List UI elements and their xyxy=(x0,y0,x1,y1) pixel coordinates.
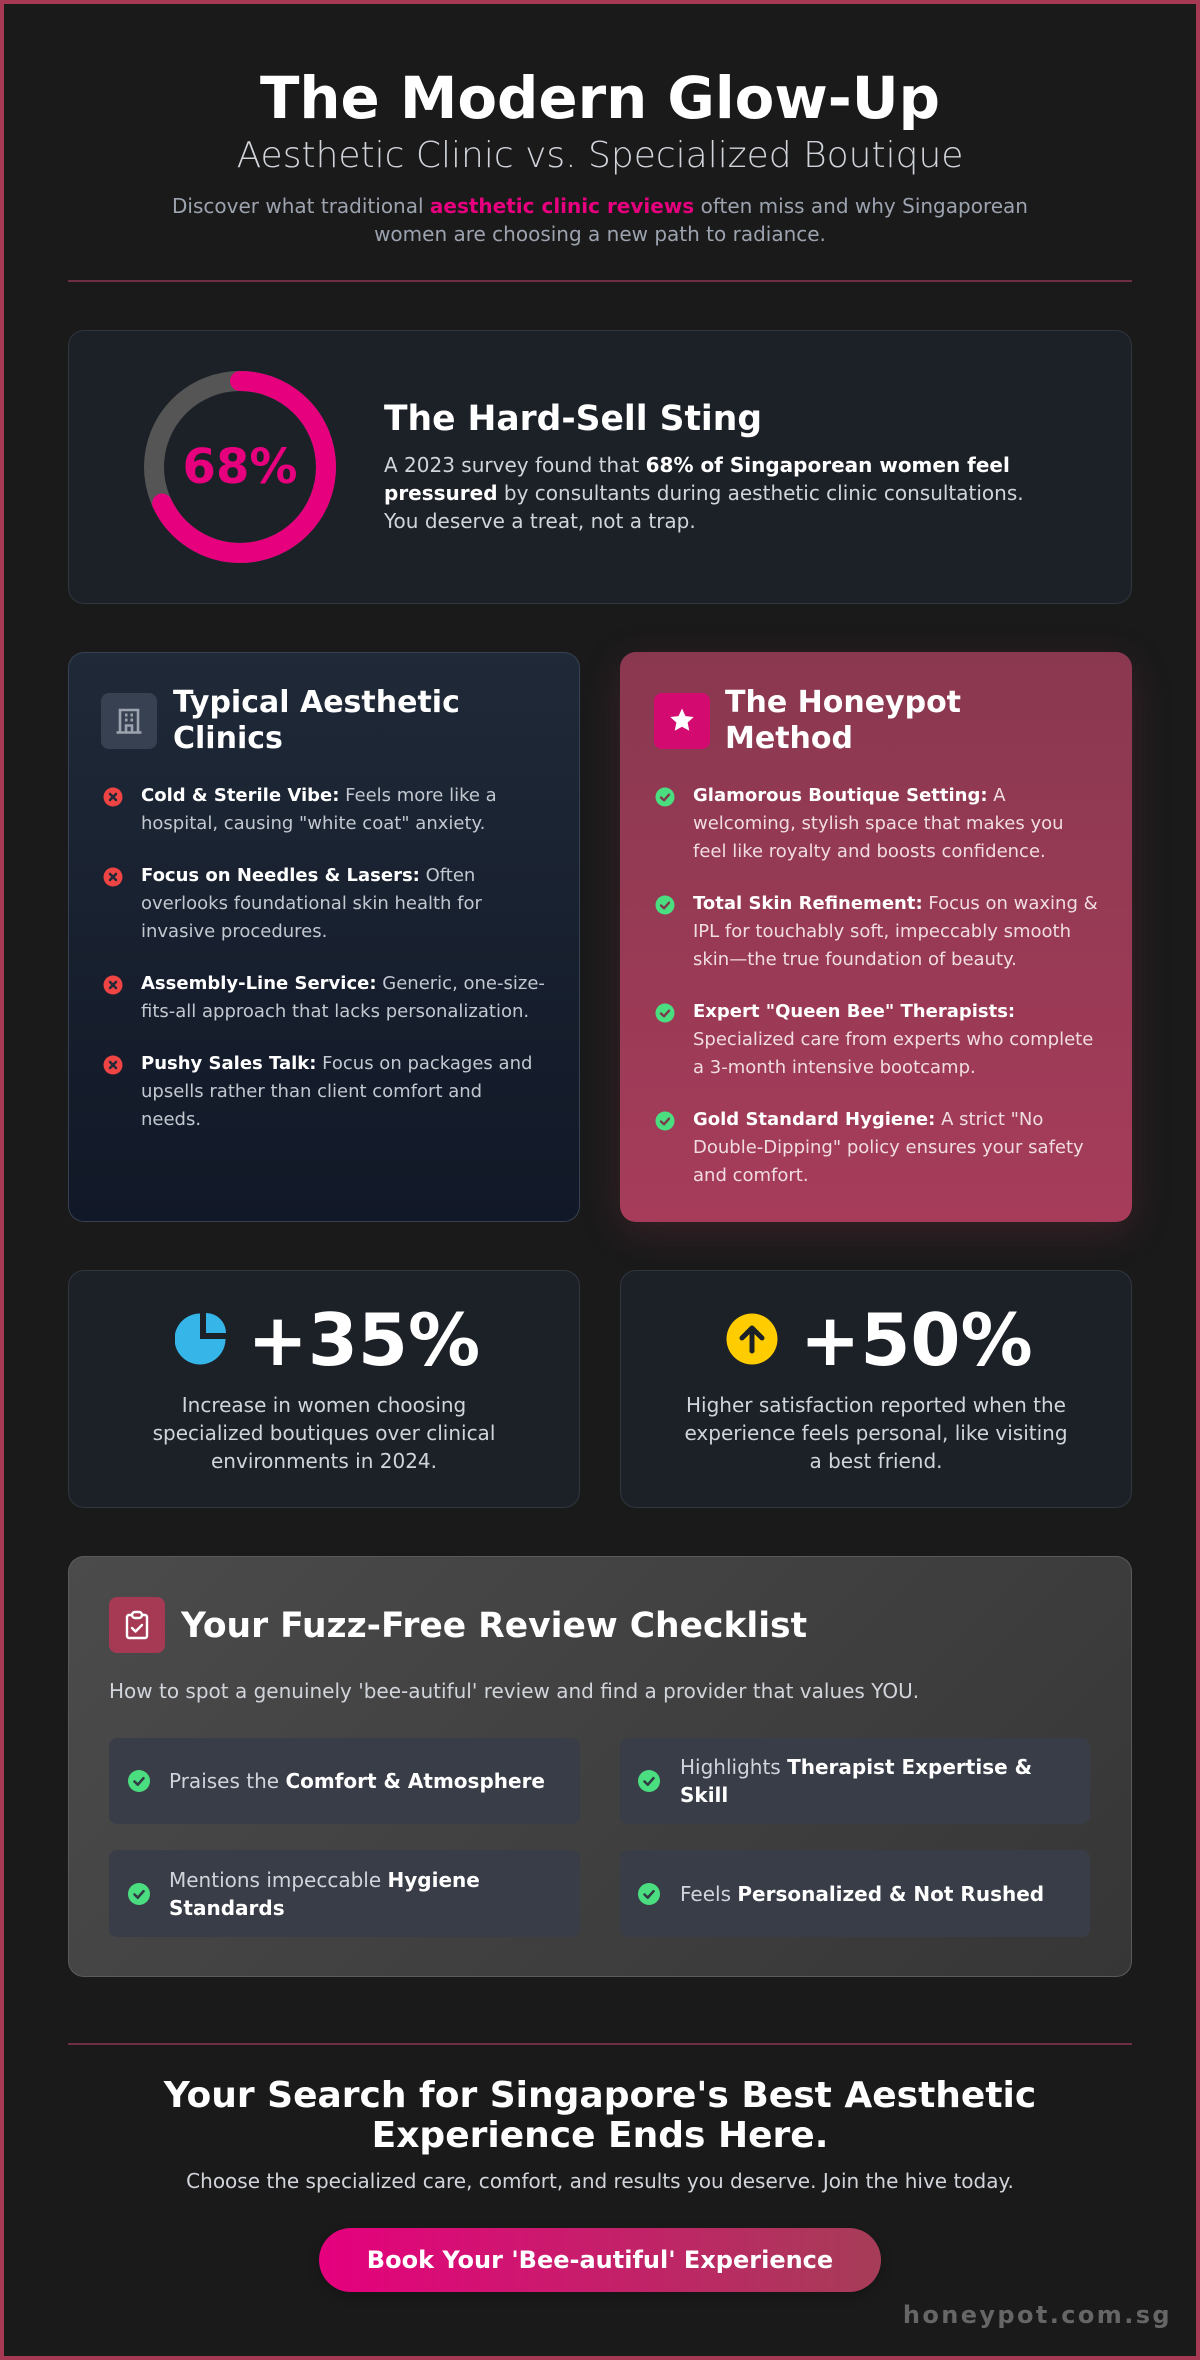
title: The Modern Glow-Up xyxy=(260,64,940,132)
icon: check xyxy=(656,1112,674,1130)
list item: fits-all approach that lacks personalization. xyxy=(141,1001,529,1022)
intro text xyxy=(172,194,1028,246)
intro text: Discover what traditional aesthetic clinic reviews often miss and why Singaporean xyxy=(172,194,1028,218)
heading: Clinics xyxy=(173,721,283,756)
list item: Total Skin Refinement: Focus on waxing & xyxy=(693,893,1098,914)
panel: review checklist xyxy=(68,1556,1132,1977)
panel: the honeypot method xyxy=(620,652,1132,1222)
list item: Focus on Needles & Lasers: Often xyxy=(141,865,475,886)
checklist item xyxy=(620,1738,1090,1824)
list item: Expert "Queen Bee" Therapists: xyxy=(693,1001,1015,1022)
icon: check xyxy=(656,788,674,806)
list item xyxy=(693,1001,1093,1078)
stat description: environments in 2024. xyxy=(211,1449,437,1473)
list item: Assembly-Line Service: Generic, one-size- xyxy=(141,973,545,994)
list item xyxy=(693,785,1064,862)
heading xyxy=(725,685,961,756)
donut chart: 68%: 68% xyxy=(183,439,297,495)
icon: check xyxy=(656,1004,674,1022)
donut chart: 68% xyxy=(144,371,336,563)
icon: check xyxy=(656,896,674,914)
list item: overlooks foundational skin health for xyxy=(141,893,482,914)
stat description: a best friend. xyxy=(809,1449,943,1473)
list item xyxy=(141,1053,532,1130)
intro text: women are choosing a new path to radiance. xyxy=(374,222,826,246)
list item xyxy=(693,1109,1084,1186)
list item: upsells rather than client comfort and xyxy=(141,1081,482,1102)
list item xyxy=(693,893,1098,970)
list item: hospital, causing "white coat" anxiety. xyxy=(141,813,485,834)
heading: Method xyxy=(725,721,853,756)
icon: up arrow xyxy=(726,1314,778,1364)
watermark: honeypot.com.sg xyxy=(903,2301,1172,2329)
list item: and comfort. xyxy=(693,1165,809,1186)
checklist item: Praises the Comfort & Atmosphere xyxy=(169,1769,545,1793)
checklist item: Highlights Therapist Expertise & xyxy=(680,1755,1032,1779)
closing heading: Experience Ends Here. xyxy=(372,2115,828,2156)
list item: feel like royalty and boosts confidence. xyxy=(693,841,1046,862)
checklist item: Standards xyxy=(169,1896,285,1920)
list item: a 3-month intensive bootcamp. xyxy=(693,1057,976,1078)
heading: Typical Aesthetic xyxy=(173,685,460,720)
panel: stat +50% xyxy=(620,1270,1132,1508)
checklist item xyxy=(620,1850,1090,1937)
list item: Double-Dipping" policy ensures your safety xyxy=(693,1137,1084,1158)
panel: hard-sell sting xyxy=(68,330,1132,604)
body text: You deserve a treat, not a trap. xyxy=(384,509,696,533)
stat description xyxy=(153,1393,495,1473)
button xyxy=(319,2228,881,2292)
stat description: experience feels personal, like visiting xyxy=(684,1421,1068,1445)
panel: typical aesthetic clinics xyxy=(68,652,580,1222)
heading: Your Fuzz-Free Review Checklist xyxy=(181,1606,807,1646)
subtitle: Aesthetic Clinic vs. Specialized Boutique xyxy=(237,135,963,176)
list item xyxy=(141,785,497,834)
button: Book Your 'Bee-autiful' Experience xyxy=(367,2246,833,2274)
list item: Specialized care from experts who complete xyxy=(693,1029,1093,1050)
icon: cross xyxy=(104,976,122,994)
icon: clipboard xyxy=(109,1597,165,1653)
stat value: +50% xyxy=(800,1298,1033,1382)
stat description: Increase in women choosing xyxy=(182,1393,466,1417)
checklist item xyxy=(109,1850,580,1937)
icon: building xyxy=(101,693,157,749)
stat description xyxy=(684,1393,1068,1473)
body text: pressured by consultants during aesthetic clinic consultations. xyxy=(384,481,1024,505)
list item: skin—the true foundation of beauty. xyxy=(693,949,1017,970)
stat description: Higher satisfaction reported when the xyxy=(686,1393,1066,1417)
list item: Glamorous Boutique Setting: A xyxy=(693,785,1006,806)
checklist item: Skill xyxy=(680,1783,728,1807)
stat description: specialized boutiques over clinical xyxy=(153,1421,495,1445)
list item: invasive procedures. xyxy=(141,921,327,942)
closing heading xyxy=(163,2075,1036,2156)
icon: star xyxy=(654,693,710,749)
list item: Gold Standard Hygiene: A strict "No xyxy=(693,1109,1043,1130)
list item: needs. xyxy=(141,1109,201,1130)
icon: cross xyxy=(104,1056,122,1074)
icon: cross xyxy=(104,868,122,886)
closing text: Choose the specialized care, comfort, and results you deserve. Join the hive today. xyxy=(186,2169,1014,2193)
heading: The Honeypot xyxy=(725,685,961,720)
list item xyxy=(141,973,545,1022)
list item: Cold & Sterile Vibe: Feels more like a xyxy=(141,785,497,806)
header xyxy=(172,64,1028,246)
list item: welcoming, stylish space that makes you xyxy=(693,813,1064,834)
icon: pie chart xyxy=(175,1313,226,1364)
list item xyxy=(141,865,482,942)
heading xyxy=(173,685,460,756)
checklist item: Mentions impeccable Hygiene xyxy=(169,1868,480,1892)
icon: cross xyxy=(104,788,122,806)
panel: stat +35% xyxy=(68,1270,580,1508)
body text xyxy=(384,453,1024,533)
checklist item xyxy=(109,1738,580,1824)
list item: Pushy Sales Talk: Focus on packages and xyxy=(141,1053,532,1074)
list item: IPL for touchably soft, impeccably smooth xyxy=(693,921,1071,942)
heading: The Hard-Sell Sting xyxy=(384,399,762,439)
stat value: +35% xyxy=(248,1298,480,1382)
intro text: How to spot a genuinely 'bee-autiful' review and find a provider that values YOU. xyxy=(109,1679,919,1703)
footer call to action xyxy=(163,2075,1036,2292)
checklist item: Feels Personalized & Not Rushed xyxy=(680,1882,1044,1906)
closing heading: Your Search for Singapore's Best Aesthetic xyxy=(164,2075,1036,2116)
body text: A 2023 survey found that 68% of Singaporean women feel xyxy=(384,453,1010,477)
